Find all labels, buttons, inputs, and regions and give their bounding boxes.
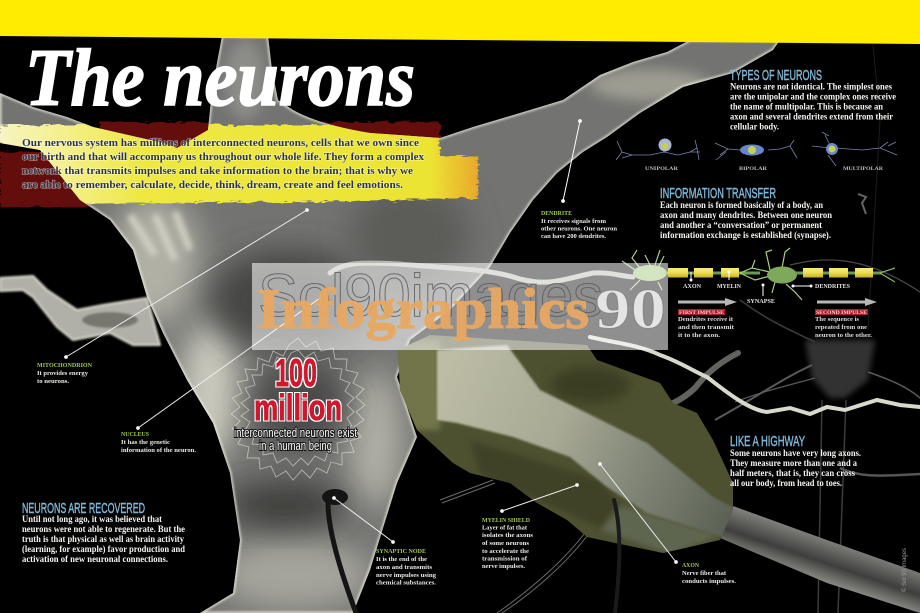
second impulse: repeated from one [815, 325, 867, 331]
callout: dendrite [541, 120, 617, 240]
pointers [690, 271, 812, 296]
dark red brush strip [0, 122, 440, 207]
callout: mitochondrion: to neurons. [37, 378, 69, 385]
thin fibres lower [440, 480, 590, 613]
second impulse: neuron to the other. [815, 333, 873, 339]
heading: neurons are recovered: NEURONS ARE RECOVERED [22, 500, 145, 517]
callout: nucleus [121, 298, 320, 454]
callout: synaptic node [333, 497, 437, 586]
text: information transfer: Each neuron is formed basically of a body, an [660, 200, 824, 211]
labels: SYNAPSE [747, 299, 775, 305]
callout: synaptic node: nerve impulses using [376, 572, 437, 579]
long ribbon dendrites [330, 263, 920, 414]
intro text block: Our nervous system has millions of interconnected neurons, cells that we own since [22, 137, 419, 149]
callout: myelin shield: Layer of fat that [482, 524, 528, 532]
icon: multipolar neuron [812, 132, 897, 172]
icon: bipolar neuron: BIPOLAR [739, 166, 768, 172]
text: types of neurons [730, 82, 897, 132]
callout: axon: Nerve fiber that [682, 570, 727, 577]
icon: unipolar neuron: UNIPOLAR [645, 166, 679, 172]
callout: mitochondrion [37, 209, 308, 385]
labels [683, 284, 850, 305]
100: 100 [275, 352, 317, 395]
icon: unipolar neuron [616, 138, 700, 172]
callout: nucleus: information of the neuron. [121, 447, 196, 454]
callout: nucleus: NUCLEUS [121, 432, 149, 438]
credit: © Sol 90 Images [900, 547, 908, 592]
second axon with myelin segments [795, 268, 895, 282]
neuron body [0, 38, 778, 613]
text: neurons are recovered: truth is that physical as well as brain activity [22, 534, 184, 545]
text: like a highway: half meters, that is, they can cross [730, 468, 855, 479]
callout: mitochondrion: MITOCHONDRION [37, 363, 93, 369]
heading: like a highway: LIKE A HIGHWAY [730, 433, 805, 450]
yellow brush strip over the neuron [0, 125, 478, 204]
callout: myelin shield: transmission of [482, 556, 528, 562]
intro text block: our birth and that will accompany us throughout our whole life. They form a complex [22, 151, 424, 163]
first impulse: FIRST IMPULSE [679, 310, 724, 316]
callout: axon [599, 463, 736, 585]
text: neurons are recovered [22, 514, 186, 565]
text: neurons are recovered: activation of new neuronal connections. [22, 554, 168, 565]
callout: synaptic node: axon and transmits [376, 564, 433, 571]
labels: MYELIN [717, 284, 742, 290]
callout: myelin shield: to accelerate the [482, 548, 529, 555]
dark tubes: synaptic node and myelin fibre [322, 489, 619, 613]
text: like a highway: all our body, from head to toes. [730, 478, 842, 489]
heading: information transfer: INFORMATION TRANSFER [660, 185, 776, 202]
panel: like a highway [730, 433, 861, 489]
text: types of neurons: axon and several dendrites extend from their [730, 112, 894, 122]
icon: multipolar neuron: MULTIPOLAR [843, 166, 884, 172]
callout: axon: AXON [682, 563, 700, 569]
panel: types of neurons [730, 67, 897, 132]
diagram: synapse transfer [622, 248, 895, 339]
callout: dendrite: can have 200 dendrites. [541, 233, 606, 240]
callout: myelin shield: isolates the axons [482, 532, 534, 539]
callout: synaptic node: chemical substances. [376, 580, 436, 586]
labels: DENDRITES [815, 284, 850, 290]
first impulse: and then transmit [678, 325, 734, 331]
text: like a highway: They measure more than one and a [730, 458, 857, 469]
title: The neurons [25, 32, 415, 123]
callout: myelin shield: nerve impulses. [482, 563, 525, 570]
second impulse: SECOND IMPULSE [816, 310, 867, 316]
text: information transfer [660, 200, 833, 241]
text: types of neurons: the name of multipolar. This is because an [730, 102, 884, 112]
text: information transfer: and another a “conversation” or permanent [660, 220, 823, 231]
text: neurons are recovered: (learning, for example) favor production and [22, 544, 186, 555]
text: like a highway: Some neurons have very long axons. [730, 448, 861, 459]
intro text block: are able to remember, calculate, decide, think, dream, create and feel emotions. [22, 179, 403, 191]
watermark [252, 262, 668, 350]
text: neurons are recovered: neurons were not able to regenerate. But the [22, 524, 186, 535]
lower-right axon [720, 506, 920, 613]
watermark: Sol90images [258, 262, 603, 329]
small background neuron at right [715, 44, 920, 613]
second impulse: The sequence is [815, 317, 860, 323]
top yellow band [0, 0, 920, 44]
zigzag burst [231, 338, 365, 480]
text: like a highway [730, 448, 861, 489]
watermark: 90 [595, 278, 666, 341]
callout: nucleus: It has the genetic [121, 439, 170, 446]
text: types of neurons: Neurons are not identical. The simplest ones [730, 82, 892, 92]
caption: interconnected neurons exist [234, 426, 357, 440]
text: information transfer: information exchange is established (synapse). [660, 230, 831, 241]
icon: bipolar neuron [715, 140, 797, 172]
myelin shield [390, 330, 740, 560]
callout: myelin shield: MYELIN SHIELD [482, 518, 530, 524]
callout: dendrite: DENDRITE [541, 211, 572, 217]
caption: in a human being [259, 439, 332, 453]
callout: dendrite: It receives signals from [541, 218, 607, 225]
text: types of neurons: cellular body. [730, 122, 779, 132]
first impulse: it to the axon. [678, 333, 721, 339]
callout: myelin shield [482, 484, 578, 570]
left dendrite [0, 276, 160, 345]
first impulse [678, 309, 734, 339]
arrows [678, 298, 877, 306]
axon with myelin segments [665, 268, 760, 278]
intro text block [22, 137, 424, 191]
neuron two soma and dendrites [740, 248, 802, 300]
callout: dendrite: other neurons. One neuron [541, 226, 617, 232]
callout: synaptic node: It is the end of the [376, 556, 427, 563]
caption [234, 426, 357, 453]
panel: information transfer [660, 185, 833, 241]
text: types of neurons: are the unipolar and the complex ones receive [730, 92, 897, 102]
callout: axon: conducts impulses. [682, 578, 736, 585]
neuron one soma and dendrites [622, 250, 667, 290]
million: million [254, 387, 342, 428]
first impulse: Dendrites receive it [678, 317, 733, 323]
panel: neurons are recovered [22, 500, 186, 565]
callout: myelin shield: of some neurons [482, 540, 530, 547]
text: information transfer: axon and many dendrites. Between one neuron [660, 210, 833, 221]
callout: mitochondrion: It provides energy [37, 370, 89, 377]
text: neurons are recovered: Until not long ago, it was believed that [22, 514, 163, 525]
labels: AXON [683, 284, 702, 290]
second impulse [815, 309, 873, 339]
heading: types of neurons: TYPES OF NEURONS [730, 67, 822, 84]
callout: synaptic node: SYNAPTIC NODE [376, 549, 426, 555]
watermark: Infographics [257, 278, 589, 341]
intro text block: network that transmits impulses and take information to the brain; that is why we [22, 165, 413, 177]
callout: 100 million [231, 338, 365, 480]
